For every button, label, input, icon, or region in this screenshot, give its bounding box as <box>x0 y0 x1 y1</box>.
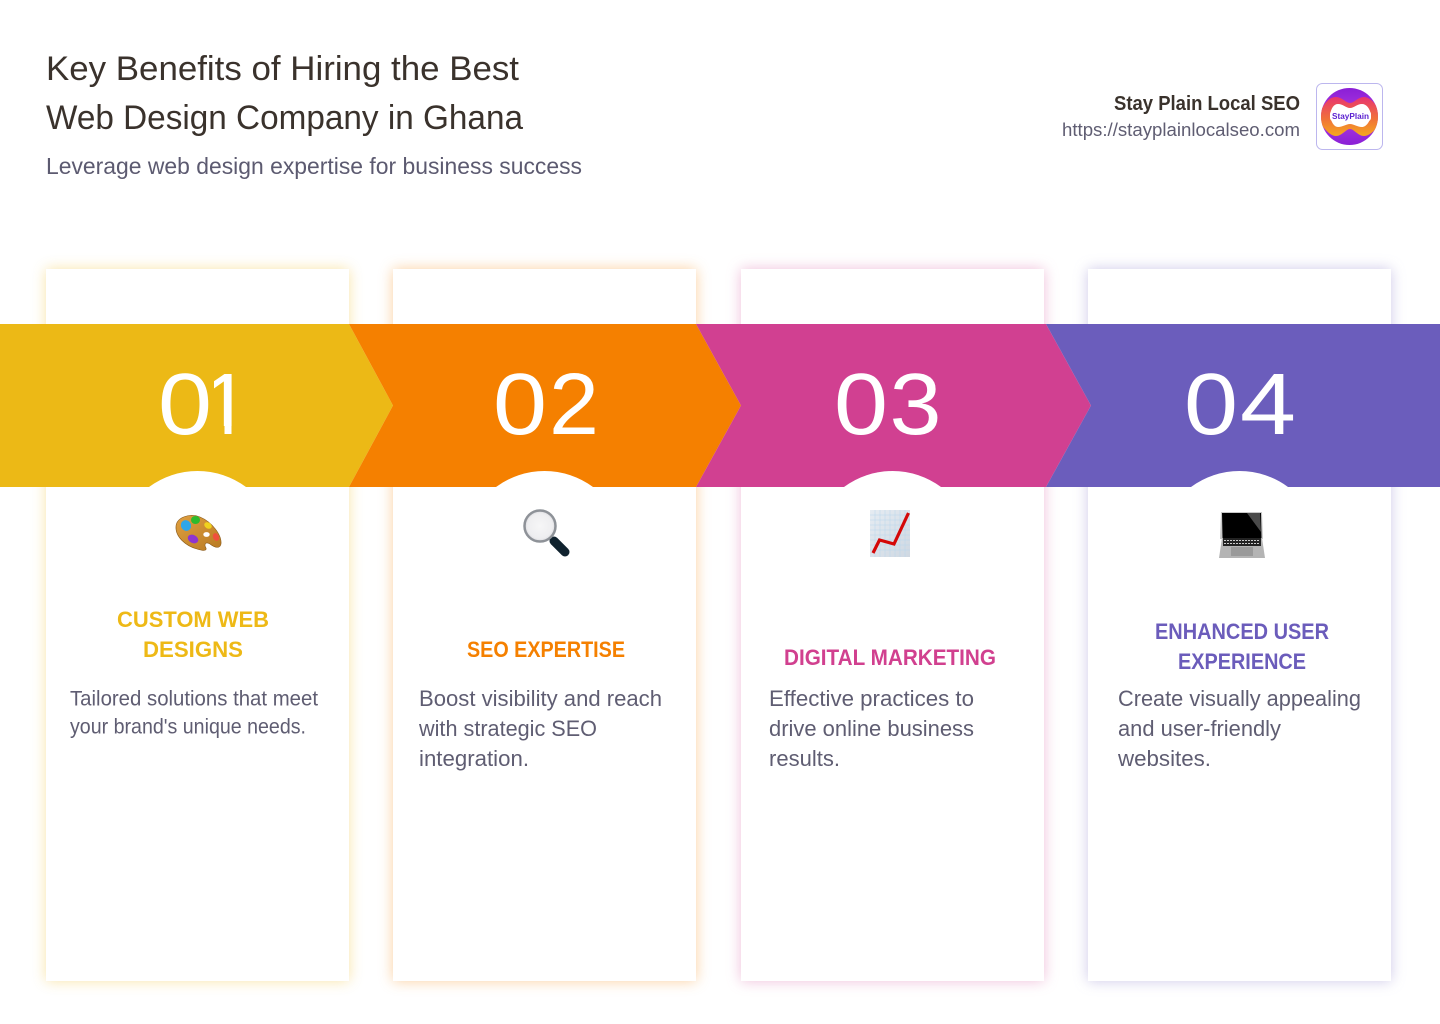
brand logo <box>1316 84 1382 150</box>
card 4 heading: ENHANCED USER <box>1155 619 1329 644</box>
title: Key Benefits of Hiring the Best <box>46 50 520 88</box>
brand url: https://stayplainlocalseo.com <box>1062 119 1300 140</box>
subtitle: Leverage web design expertise for business success <box>46 153 582 179</box>
number 01: 0 <box>158 356 212 453</box>
card 3 text: drive online business <box>769 716 974 741</box>
card 2 text: integration. <box>419 746 529 771</box>
title <box>46 50 523 137</box>
card 2 text: Boost visibility and reach <box>419 686 662 711</box>
brand name: Stay Plain Local SEO <box>1114 93 1300 115</box>
icon: artist palette <box>176 515 221 550</box>
number 02: 2 <box>549 356 599 453</box>
card 1 heading <box>117 607 269 662</box>
card 1 text: Tailored solutions that meet <box>70 688 318 710</box>
icon: laptop <box>1219 512 1265 558</box>
card 4 text: Create visually appealing <box>1118 686 1361 711</box>
number 04 <box>1184 356 1296 453</box>
icon: chart increasing <box>870 510 910 557</box>
icon: magnifying glass <box>524 510 565 552</box>
card 1 heading: CUSTOM WEB <box>117 607 269 632</box>
card 1 text <box>70 688 318 738</box>
panel: card 3 background <box>741 269 1044 981</box>
title: Web Design Company in Ghana <box>46 99 523 137</box>
number 01 <box>162 373 232 435</box>
card 4 text <box>1117 686 1361 771</box>
number 01: 1 <box>202 356 250 453</box>
number 03: 0 <box>834 356 888 453</box>
number 04: 0 <box>1184 356 1238 453</box>
brand block <box>1062 84 1382 150</box>
arrow band segment 3 <box>696 324 1091 487</box>
card 2 text <box>418 686 662 771</box>
card 4 text: and user-friendly <box>1118 716 1281 741</box>
card 4 heading <box>1155 619 1329 674</box>
panel: card 4 background <box>1088 269 1391 981</box>
card 1 heading: DESIGNS <box>143 637 243 662</box>
panel: card 2 background <box>393 269 696 981</box>
card 3 text: Effective practices to <box>769 686 974 711</box>
number 03: 3 <box>890 356 942 453</box>
number 04: 4 <box>1240 356 1296 453</box>
card 3 text <box>769 686 974 771</box>
icon notch 3 <box>844 471 941 487</box>
panel: card 1 background <box>46 269 349 981</box>
number 02 <box>493 356 599 453</box>
icon notch 1 <box>149 471 246 487</box>
arrow band segment 4 <box>1046 324 1440 487</box>
number 03 <box>834 356 942 453</box>
card 2 text: with strategic SEO <box>418 716 597 741</box>
arrow band segment 1 <box>0 324 393 487</box>
card 4 heading: EXPERIENCE <box>1178 649 1306 674</box>
card 4 text: websites. <box>1117 746 1211 771</box>
icon notch 2 <box>496 471 593 487</box>
arrow band segment 2 <box>349 324 741 487</box>
card 1 text: your brand's unique needs. <box>70 716 306 738</box>
card 3 text: results. <box>769 746 840 771</box>
card 2 heading: SEO EXPERTISE <box>467 637 625 662</box>
icon notch 4 <box>1191 471 1288 487</box>
card 3 heading: DIGITAL MARKETING <box>784 645 996 670</box>
number 02: 0 <box>493 356 547 453</box>
brand logo: StayPlain <box>1332 112 1369 121</box>
